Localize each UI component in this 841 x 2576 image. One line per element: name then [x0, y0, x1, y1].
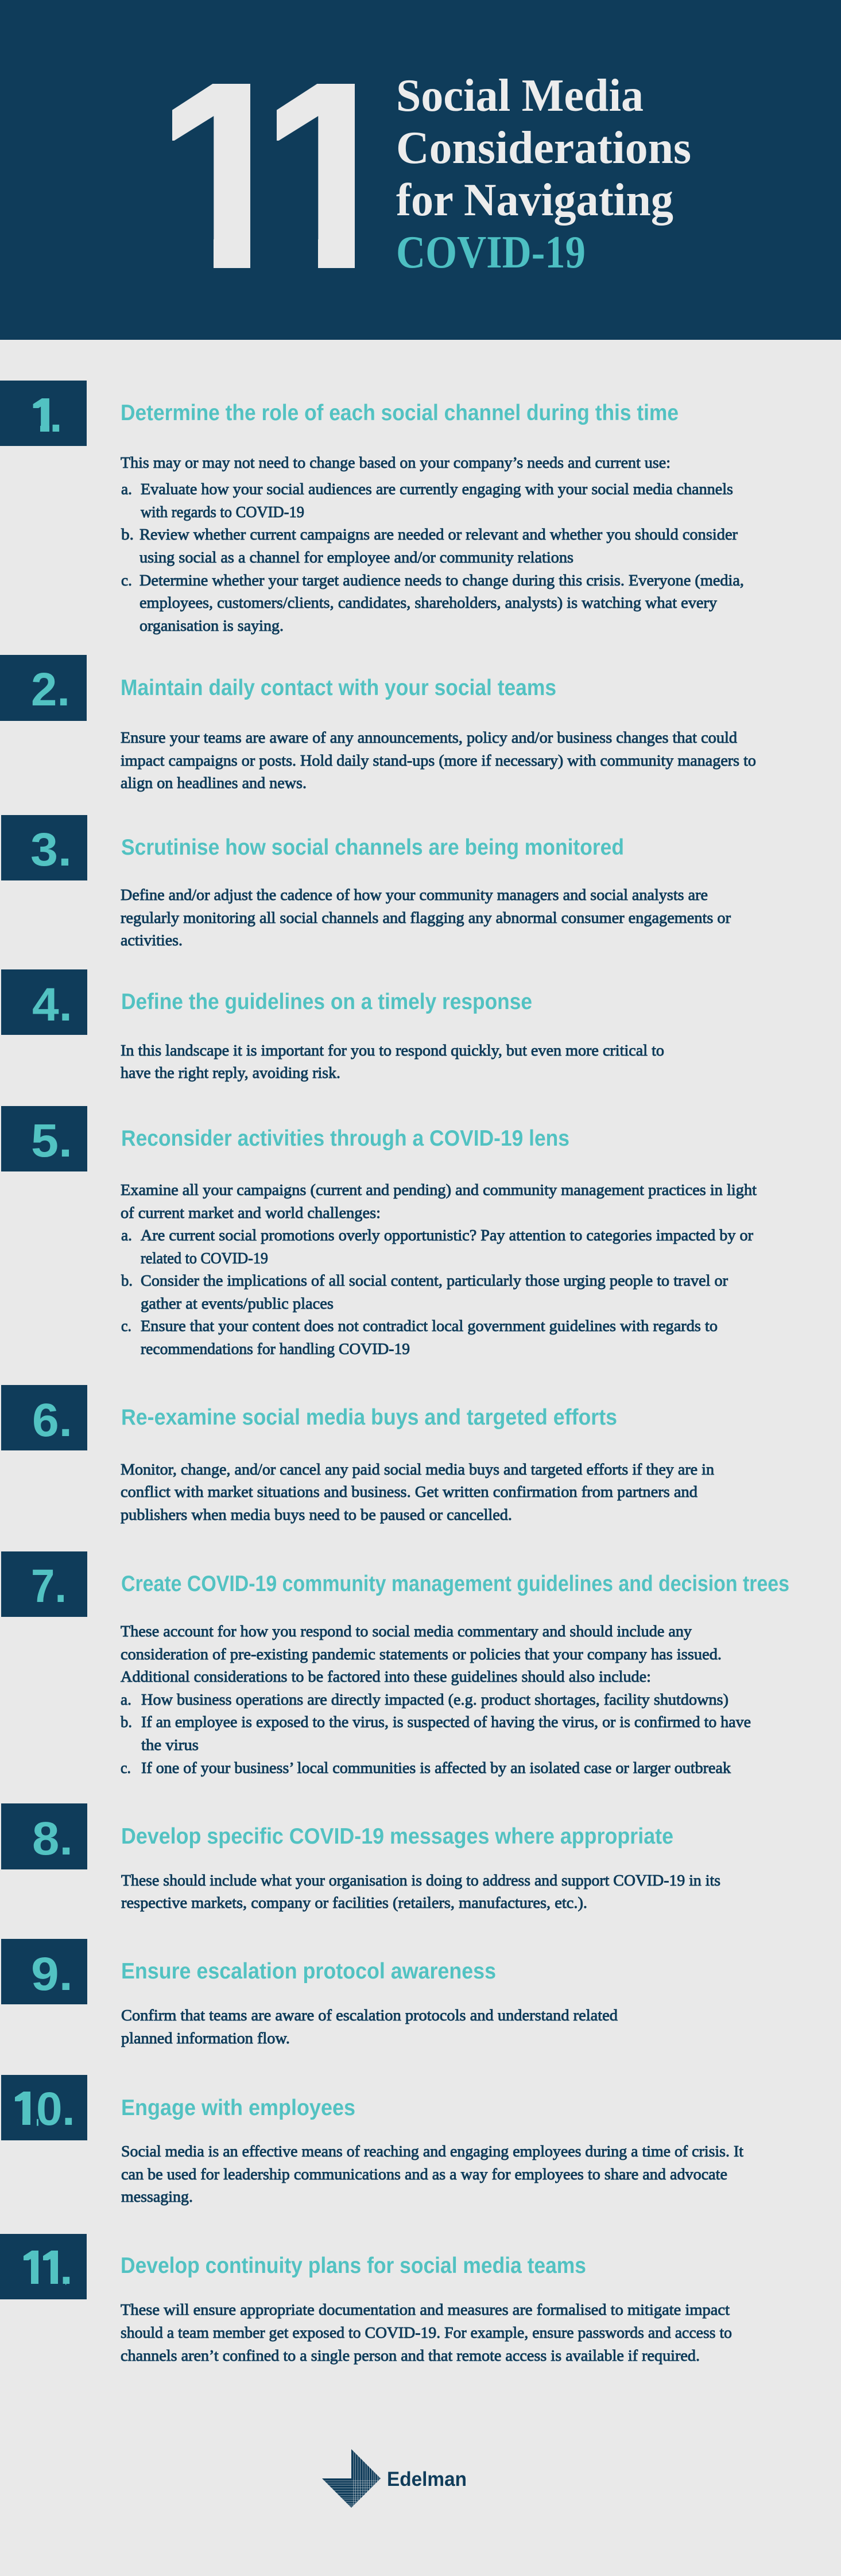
number box 11: . — [60, 2242, 73, 2294]
big number 11: 11 — [152, 24, 406, 325]
body 5: gather at events/public places — [141, 1295, 334, 1312]
heading 9: Ensure escalation protocol awareness — [121, 1959, 496, 1984]
section 4 — [1, 969, 664, 1081]
body 1: c. — [121, 572, 132, 589]
body 1: Review whether current campaigns are needed or relevant and whether you should consider — [139, 526, 738, 543]
body 9: planned information flow. — [121, 2030, 290, 2047]
body 1 — [121, 454, 744, 634]
heading 2: Maintain daily contact with your social teams — [121, 676, 556, 700]
section 11 — [0, 2234, 732, 2364]
body 8 — [121, 1872, 720, 1911]
heading 4: Define the guidelines on a timely response — [121, 990, 532, 1014]
body 5: related to COVID-19 — [141, 1250, 268, 1267]
body 5: of current market and world challenges: — [121, 1204, 381, 1221]
body 4: have the right reply, avoiding risk. — [121, 1064, 340, 1081]
section 5 — [1, 1106, 757, 1357]
body 7: How business operations are directly impacted (e.g. product shortages, facility shutdowns) — [141, 1691, 728, 1708]
body 1: a. — [121, 480, 132, 498]
body 1: employees, customers/clients, candidates, shareholders, analysts) is watching what every — [139, 594, 718, 611]
section 1 — [0, 381, 744, 634]
body 11 — [121, 2301, 732, 2364]
section 9 — [1, 1939, 618, 2047]
number box 4: 4. — [32, 979, 72, 1031]
body 10: can be used for leadership communications and as a way for employees to share and advocate — [121, 2166, 727, 2183]
body 7: These account for how you respond to social media commentary and should include any — [121, 1623, 692, 1640]
Edelman logo — [321, 2449, 467, 2508]
body 4: In this landscape it is important for you to respond quickly, but even more critical to — [121, 1042, 664, 1059]
body 2: align on headlines and news. — [121, 774, 307, 792]
number box 7 — [1, 1551, 87, 1617]
number box 9 — [1, 1939, 87, 2004]
body 5: a. — [121, 1227, 132, 1244]
body 6: publishers when media buys need to be paused or cancelled. — [121, 1506, 512, 1523]
number box 3 — [1, 815, 87, 880]
number box 6 — [1, 1385, 87, 1450]
header banner — [0, 0, 841, 340]
number box 5 — [1, 1106, 87, 1171]
number box 10: 1 — [13, 2083, 38, 2135]
body 1: Determine whether your target audience needs to change during this crisis. Everyone (media, — [139, 572, 744, 589]
body 5: Ensure that your content does not contradict local government guidelines with regards to — [141, 1317, 718, 1334]
body 11: should a team member get exposed to COVID-19. For example, ensure passwords and access to — [121, 2324, 732, 2341]
number box 1: . — [49, 390, 63, 442]
body 7: the virus — [141, 1736, 199, 1753]
body 2: Ensure your teams are aware of any announcements, policy and/or business changes that could — [121, 729, 738, 746]
title — [396, 71, 691, 278]
title: Considerations — [396, 123, 691, 173]
body 1: This may or may not need to change based on your company’s needs and current use: — [121, 454, 671, 471]
number box 11 — [0, 2234, 87, 2299]
number box 1 — [0, 381, 87, 446]
body 7: Additional considerations to be factored into these guidelines should also include: — [121, 1668, 651, 1685]
body 6: conflict with market situations and business. Get written confirmation from partners and — [121, 1483, 698, 1500]
body 5: Examine all your campaigns (current and pending) and community management practices in light — [121, 1181, 757, 1198]
body 6 — [121, 1461, 715, 1523]
section 8 — [1, 1803, 720, 1911]
body 10 — [121, 2143, 744, 2205]
body 3: Define and/or adjust the cadence of how your community managers and social analysts are — [121, 886, 708, 903]
body 2: impact campaigns or posts. Hold daily stand-ups (more if necessary) with community managers to — [121, 752, 756, 769]
body 5: recommendations for handling COVID-19 — [141, 1340, 410, 1357]
body 7: If one of your business’ local communities is affected by an isolated case or larger outbreak — [141, 1759, 731, 1776]
title: Social Media — [396, 71, 644, 121]
number box 10 — [1, 2075, 87, 2140]
body 3: regularly monitoring all social channels and flagging any abnormal consumer engagements or — [121, 909, 731, 926]
section 7 — [1, 1551, 789, 1776]
body 8: These should include what your organisation is doing to address and support COVID-19 in its — [121, 1872, 720, 1889]
body 7: If an employee is exposed to the virus, is suspected of having the virus, or is confirmed to have — [141, 1713, 751, 1731]
body 11: These will ensure appropriate documentation and measures are formalised to mitigate impact — [121, 2301, 730, 2318]
body 1: with regards to COVID-19 — [141, 503, 304, 521]
body 9 — [121, 2007, 618, 2047]
number box 8 — [1, 1803, 87, 1869]
number box 11: 11 — [21, 2242, 67, 2294]
heading 10: Engage with employees — [121, 2096, 355, 2120]
section 10 — [1, 2075, 744, 2205]
body 7: a. — [121, 1691, 131, 1708]
number box 6: 6. — [32, 1394, 72, 1446]
body 7: consideration of pre-existing pandemic statements or policies that your company has issued. — [121, 1646, 722, 1663]
body 3: activities. — [121, 932, 183, 949]
heading 11: Develop continuity plans for social media teams — [121, 2253, 586, 2278]
heading 3: Scrutinise how social channels are being monitored — [121, 835, 624, 860]
number box 2: 2. — [31, 664, 70, 716]
body 5: Are current social promotions overly opportunistic? Pay attention to categories impacted by or — [141, 1227, 753, 1244]
number box 5: 5. — [31, 1115, 72, 1167]
body 1: using social as a channel for employee and/or community relations — [139, 549, 573, 566]
number box 10: 0. — [36, 2083, 75, 2135]
number box 7: 7. — [31, 1560, 67, 1612]
section 6 — [1, 1385, 715, 1523]
title: COVID-19 — [396, 227, 586, 278]
body 7: c. — [121, 1759, 131, 1776]
body 7: b. — [121, 1713, 132, 1731]
body 7 — [121, 1623, 751, 1776]
number box 2 — [0, 655, 87, 721]
icon: Edelman mark — [321, 2449, 381, 2508]
body 5: c. — [121, 1317, 131, 1334]
number box 4 — [1, 969, 87, 1035]
heading 8: Develop specific COVID-19 messages where appropriate — [121, 1824, 673, 1849]
body 1: Evaluate how your social audiences are currently engaging with your social media channels — [141, 480, 733, 498]
heading 6: Re-examine social media buys and targeted efforts — [121, 1405, 617, 1430]
number box 1: 1 — [31, 390, 57, 442]
title: for Navigating — [396, 175, 673, 226]
body 10: messaging. — [121, 2188, 193, 2205]
body 8: respective markets, company or facilities (retailers, manufactures, etc.). — [121, 1894, 587, 1911]
body 6: Monitor, change, and/or cancel any paid social media buys and targeted efforts if they are in — [121, 1461, 715, 1478]
body 10: Social media is an effective means of reaching and engaging employees during a time of crisis. It — [121, 2143, 744, 2160]
body 11: channels aren’t confined to a single person and that remote access is available if required. — [121, 2347, 700, 2364]
section 3 — [1, 815, 731, 949]
number box 3: 3. — [30, 824, 72, 876]
body 5 — [121, 1181, 757, 1357]
section 2 — [0, 655, 756, 792]
heading 5: Reconsider activities through a COVID-19 lens — [121, 1126, 569, 1151]
body 2 — [121, 729, 756, 792]
body 1: organisation is saying. — [139, 617, 284, 634]
number box 8: 8. — [32, 1813, 73, 1865]
number box 9: 9. — [31, 1948, 73, 2000]
heading 1: Determine the role of each social channel during this time — [121, 401, 679, 425]
body 9: Confirm that teams are aware of escalation protocols and understand related — [121, 2007, 618, 2024]
body 4 — [121, 1042, 664, 1081]
body 3 — [121, 886, 731, 949]
body 5: b. — [121, 1272, 133, 1289]
wordmark: Edelman — [387, 2468, 467, 2490]
body 1: b. — [121, 526, 134, 543]
body 5: Consider the implications of all social content, particularly those urging people to travel or — [141, 1272, 728, 1289]
